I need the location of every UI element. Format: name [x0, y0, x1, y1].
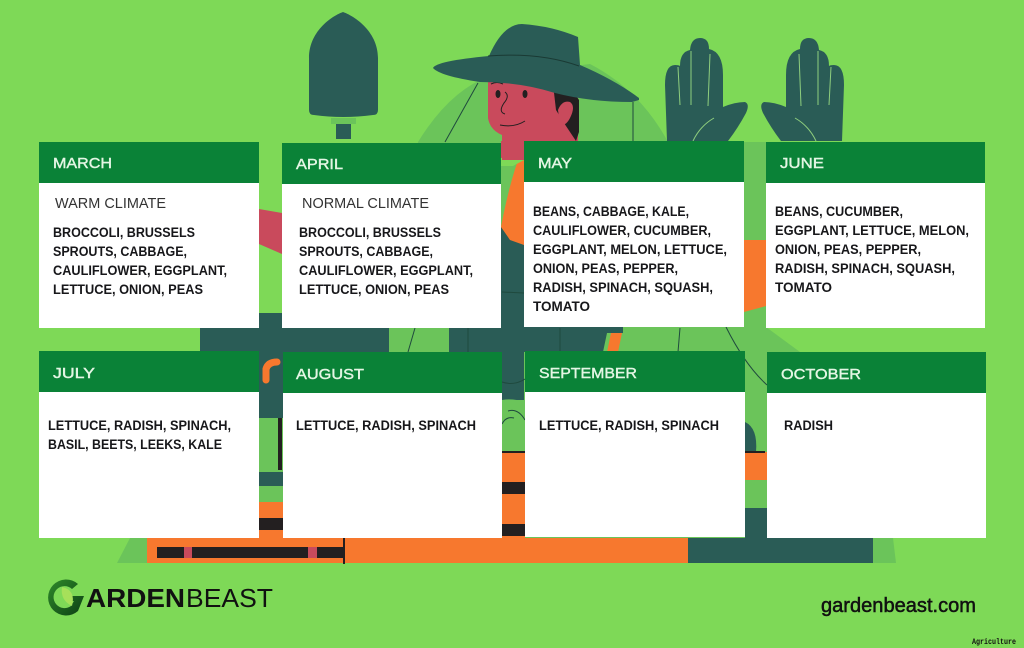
panel: July [39, 351, 259, 538]
website url: gardenbeast.com [821, 595, 976, 617]
heading: September: SEPTEMBER [539, 365, 637, 382]
heading: June: JUNE [780, 155, 824, 172]
panel: March [39, 142, 259, 328]
crop list: April: BROCCOLI, BRUSSELS [299, 225, 441, 240]
icon: right glove [761, 38, 844, 141]
crop list: March [53, 225, 227, 297]
crop list: May: ONION, PEAS, PEPPER, [533, 261, 678, 276]
orange vest [501, 160, 766, 352]
crop list: April: CAULIFLOWER, EGGPLANT, [299, 263, 473, 278]
subheading: warm climate: WARM CLIMATE [55, 196, 166, 212]
crop list: June: ONION, PEAS, PEPPER, [775, 242, 921, 257]
crop list: May: CAULIFLOWER, CUCUMBER, [533, 223, 711, 238]
panel: October [767, 352, 986, 538]
hair [553, 84, 579, 141]
crop list: March: LETTUCE, ONION, PEAS [53, 282, 203, 297]
heading: August: AUGUST [296, 366, 364, 383]
crop list: June: BEANS, CUCUMBER, [775, 204, 903, 219]
red arm [259, 209, 282, 254]
face [488, 76, 578, 160]
logo: Garden Beast [48, 580, 273, 616]
crop list: May: RADISH, SPINACH, SQUASH, [533, 280, 713, 295]
crop list: May: BEANS, CABBAGE, KALE, [533, 204, 689, 219]
crop list: August: LETTUCE, RADISH, SPINACH [296, 418, 476, 433]
heading: March: MARCH [53, 155, 112, 172]
crop list: July: LETTUCE, RADISH, SPINACH, [48, 418, 231, 433]
lines [408, 83, 767, 385]
dark overalls [200, 227, 623, 418]
crop list: May: TOMATO [533, 299, 590, 314]
crop list: May [533, 204, 727, 314]
crop list: April: SPROUTS, CABBAGE, [299, 244, 433, 259]
light green body backdrop [117, 64, 896, 563]
crop list: May: EGGPLANT, MELON, LETTUCE, [533, 242, 727, 257]
crop list: March: BROCCOLI, BRUSSELS [53, 225, 195, 240]
panel: April [282, 143, 501, 328]
crop list: March: SPROUTS, CABBAGE, [53, 244, 187, 259]
crop list: July [48, 418, 231, 452]
eyes and mouth [496, 90, 500, 98]
heading: October: OCTOBER [781, 366, 861, 383]
orange base bar [147, 538, 688, 563]
icon: trowel [309, 12, 378, 139]
hat [433, 24, 639, 102]
icon: leaf G [48, 580, 84, 616]
subheading: normal climate: NORMAL CLIMATE [302, 196, 429, 212]
crop list: July: BASIL, BEETS, LEEKS, KALE [48, 437, 222, 452]
crop list: June: TOMATO [775, 280, 832, 295]
wordmark: ARDEN [86, 583, 185, 613]
crop list: September: LETTUCE, RADISH, SPINACH [539, 418, 719, 433]
crop list: June [775, 204, 969, 295]
panel: June [766, 142, 985, 328]
category label: Agriculture [972, 638, 1016, 647]
illustration: gardener [117, 24, 896, 564]
crop list: March: CAULIFLOWER, EGGPLANT, [53, 263, 227, 278]
crop list: October: RADISH [784, 418, 833, 433]
panel: August [283, 352, 502, 538]
crop list: June: RADISH, SPINACH, SQUASH, [775, 261, 955, 276]
heading: April: APRIL [296, 156, 343, 173]
crop list: April: LETTUCE, ONION, PEAS [299, 282, 449, 297]
lower strips [259, 418, 283, 470]
crop list: April [299, 225, 473, 297]
heading: May: MAY [538, 155, 572, 172]
orange letter [266, 362, 277, 380]
heading: July: JULY [53, 365, 95, 382]
logo: Garden Beast: BEAST [186, 583, 273, 613]
icon: left glove [665, 38, 748, 141]
panel: May [524, 141, 744, 327]
panel: September [525, 351, 745, 537]
ear [558, 102, 573, 125]
crop list: June: EGGPLANT, LETTUCE, MELON, [775, 223, 969, 238]
